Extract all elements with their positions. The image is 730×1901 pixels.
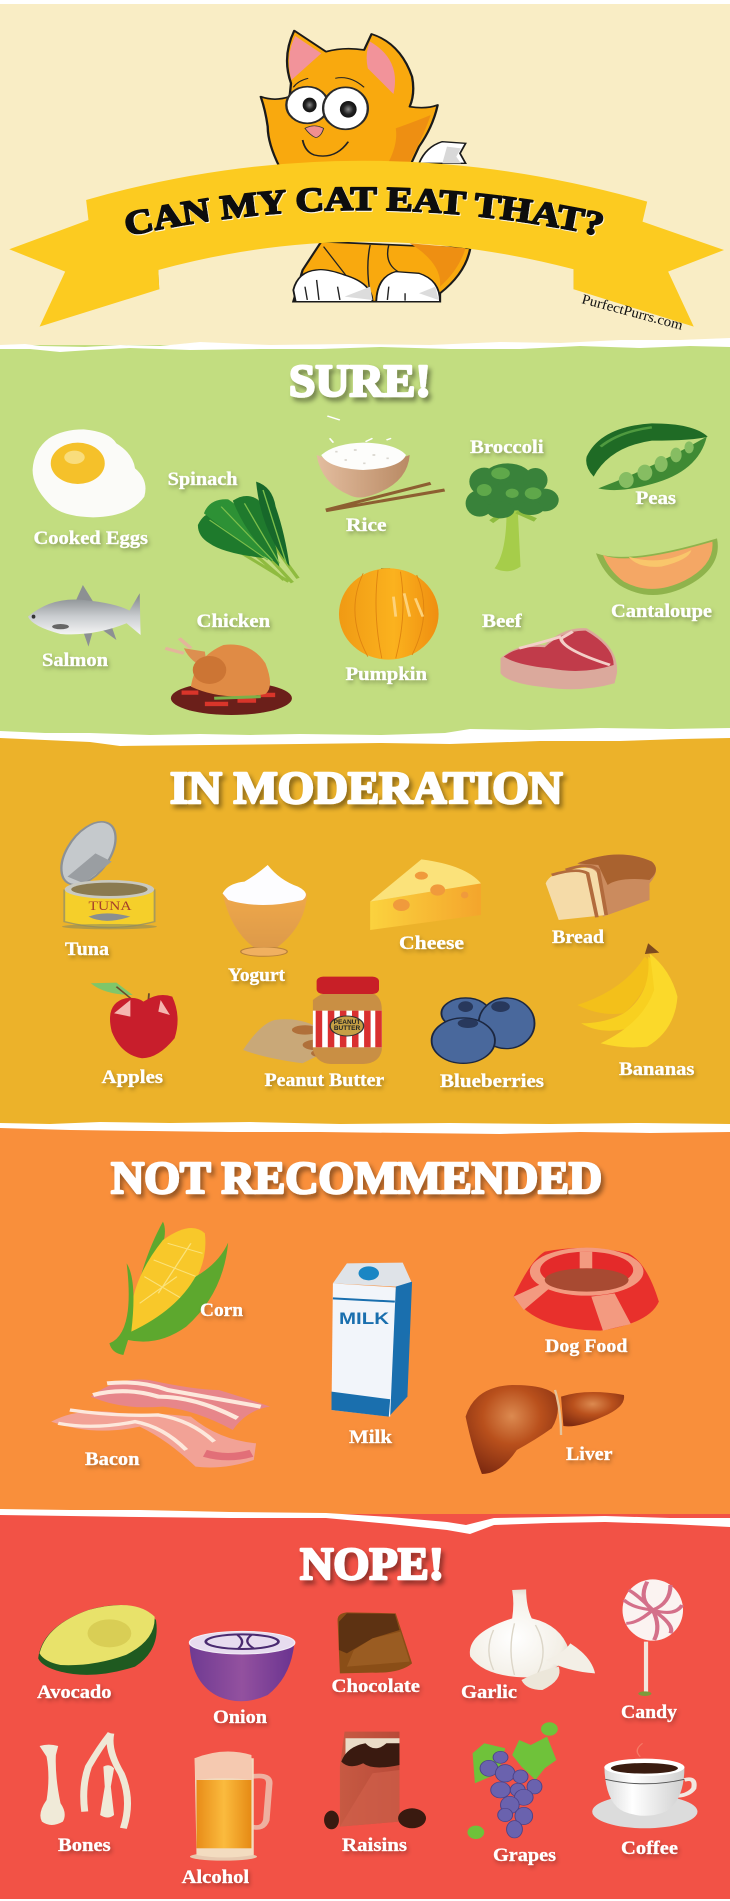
label: Garlic [461, 1683, 517, 1703]
icon: cheese [370, 859, 481, 930]
icon: raisins box [324, 1732, 426, 1829]
icon: bones [40, 1733, 128, 1828]
label: Bananas [619, 1060, 694, 1080]
banner ribbon [9, 161, 724, 327]
label: Cooked Eggs [34, 529, 148, 549]
label: Spinach [168, 470, 238, 490]
heading: not recommended: NOT RECOMMENDED [111, 1152, 602, 1203]
label: Apples [102, 1068, 163, 1088]
icon: red onion [189, 1631, 295, 1701]
icon: salmon [28, 585, 141, 647]
torn edge [0, 1509, 730, 1534]
icon: avocado [38, 1605, 157, 1675]
icon: corn [109, 1222, 228, 1355]
icon: liver [466, 1385, 624, 1474]
icon: spinach [198, 482, 298, 583]
label: Peanut Butter [264, 1071, 384, 1091]
icon: beef steak [501, 628, 617, 689]
label: Liver [566, 1445, 612, 1465]
jar label: PEANUT [334, 1019, 360, 1026]
icon: bananas [577, 943, 677, 1047]
label: Grapes [493, 1846, 556, 1866]
icon: fried egg [33, 429, 146, 517]
panel: sure [0, 338, 730, 737]
icon: peas [586, 423, 708, 490]
site credit: PurfectPurrs.com [580, 292, 684, 334]
icon: peanut butter [243, 977, 382, 1064]
label: Bones [58, 1836, 111, 1856]
label: Chocolate [332, 1677, 420, 1697]
icon: garlic [470, 1589, 595, 1690]
panel: nope [0, 1509, 730, 1901]
carton text: MILK [339, 1309, 390, 1328]
label: Tuna [65, 940, 109, 960]
label: Salmon [42, 651, 109, 671]
torn edge [0, 728, 730, 746]
icon: grapes [467, 1722, 558, 1839]
heading: nope: NOPE! [300, 1538, 444, 1589]
label: Raisins [342, 1836, 407, 1856]
label: Beef [482, 612, 523, 632]
icon: orange cat [261, 31, 470, 302]
label: Onion [213, 1708, 268, 1728]
label: Cheese [399, 934, 464, 954]
torn edge [0, 338, 730, 352]
icon: bacon [51, 1379, 270, 1467]
icon: apple [91, 983, 178, 1058]
icon: tuna can [50, 816, 157, 929]
icon: blueberries [432, 998, 535, 1063]
icon: pumpkin [339, 568, 439, 660]
label: Dog Food [545, 1337, 628, 1357]
heading: sure: SURE! [289, 355, 431, 406]
label: Alcohol [182, 1868, 249, 1888]
label: Chicken [196, 612, 271, 632]
label: Blueberries [440, 1072, 544, 1092]
label: Bacon [85, 1450, 140, 1470]
torn edge [0, 1122, 730, 1134]
icon: yogurt [223, 865, 307, 956]
icon: rice bowl [317, 416, 445, 511]
icon: milk carton [332, 1263, 412, 1417]
icon: dog bowl [514, 1248, 659, 1331]
jar label: BUTTER [334, 1025, 360, 1032]
icon: coffee cup [592, 1743, 697, 1828]
icon: chocolate [338, 1612, 412, 1673]
label: Corn [200, 1301, 244, 1321]
label: Candy [621, 1703, 678, 1723]
label: Pumpkin [346, 665, 428, 685]
label: Peas [636, 489, 676, 509]
panel: in moderation [0, 728, 730, 1130]
icon: broccoli [466, 463, 559, 571]
can label: TUNA [88, 898, 132, 913]
title: CAN MY CAT EAT THAT? [125, 186, 604, 236]
label: Yogurt [228, 966, 286, 986]
label: Coffee [621, 1839, 678, 1859]
icon: beer mug [190, 1752, 269, 1861]
heading: in moderation: IN MODERATION [170, 762, 562, 813]
icon: bread [546, 855, 656, 920]
panel: not recommended [0, 1122, 730, 1518]
label: Avocado [37, 1683, 112, 1703]
label: Milk [349, 1428, 393, 1448]
icon: lollipop candy [623, 1579, 683, 1696]
icon: cantaloupe [596, 538, 718, 595]
icon: chicken [165, 638, 292, 715]
label: Bread [552, 928, 605, 948]
label: Rice [346, 516, 386, 536]
label: Broccoli [470, 438, 544, 458]
label: Cantaloupe [611, 602, 712, 622]
panel: header [0, 4, 730, 345]
